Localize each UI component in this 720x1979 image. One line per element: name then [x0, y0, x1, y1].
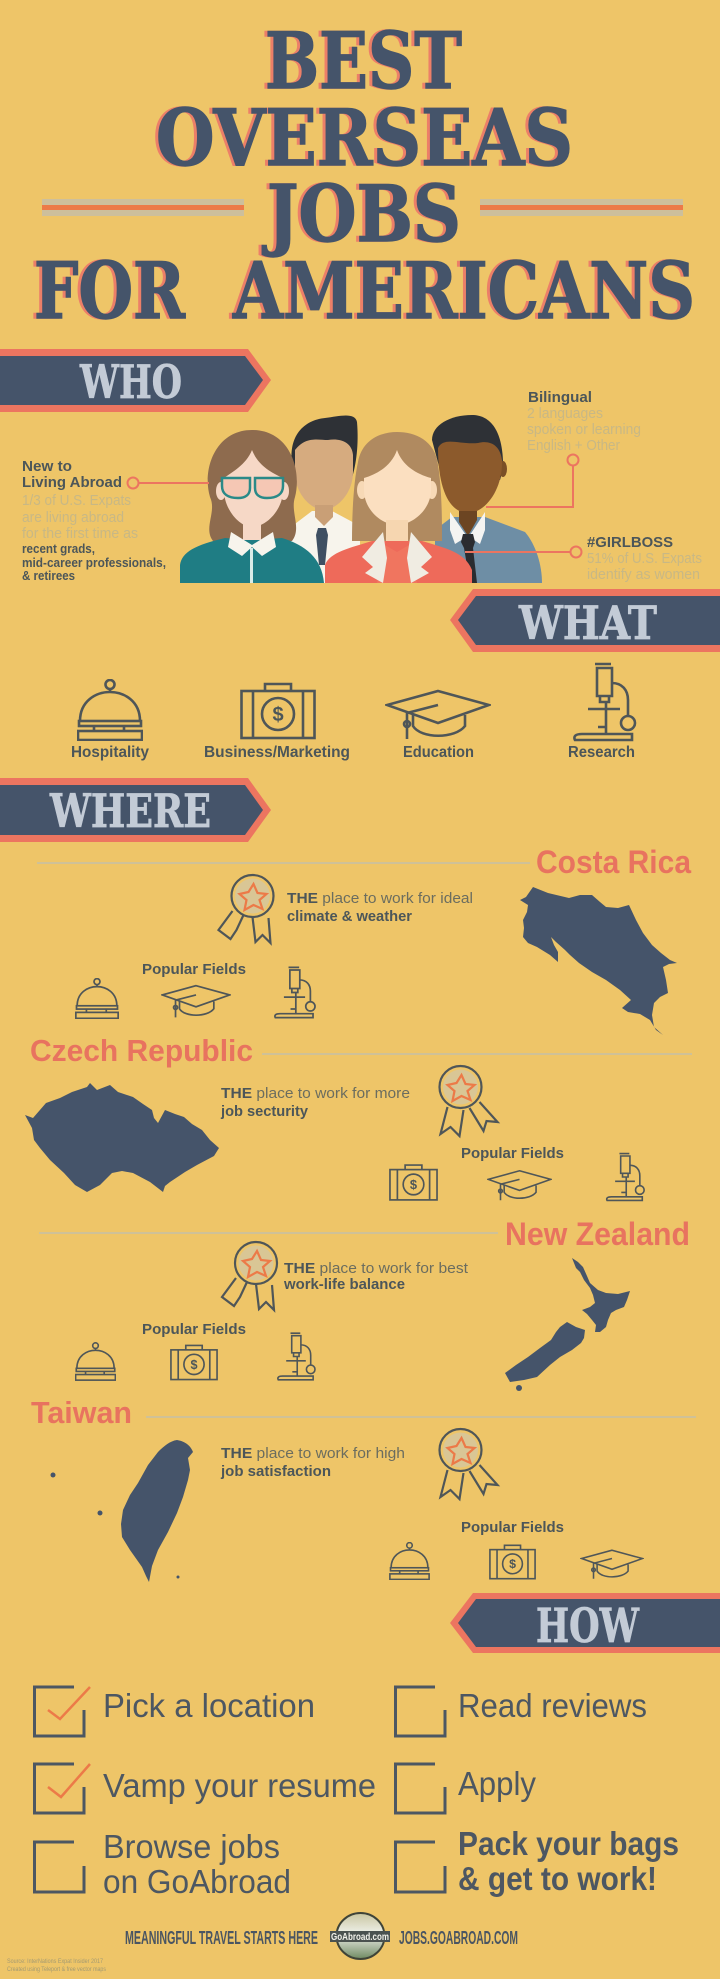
text block: work-life balance	[283, 1276, 405, 1293]
man two	[432, 415, 542, 583]
icon: graduation cap	[387, 691, 489, 739]
connector: new to living abroad	[128, 478, 209, 488]
heading: Taiwan	[31, 1395, 132, 1430]
heading: New Zealand	[505, 1216, 690, 1252]
text block	[287, 890, 473, 925]
title: BEST	[265, 16, 462, 107]
callout: bilingual	[527, 389, 641, 454]
checklist: apply	[396, 1764, 536, 1813]
popular fields	[76, 1321, 315, 1380]
title rule left	[42, 199, 244, 216]
logo: GoAbroad globe: GoAbroad.com	[331, 1932, 389, 1943]
icon: briefcase	[242, 684, 314, 738]
man one	[287, 416, 360, 583]
WHAT banner: WHAT	[518, 596, 657, 650]
source note	[7, 1959, 106, 1973]
heading: Czech Republic	[30, 1033, 253, 1068]
logo: GoAbroad globe	[330, 1913, 390, 1959]
callout: bilingual: Bilingual	[528, 389, 592, 406]
text block: THE place to work for high	[221, 1445, 405, 1462]
WHO banner	[0, 349, 271, 412]
text block: THE place to work for ideal	[287, 890, 473, 907]
text block: THE place to work for best	[284, 1260, 469, 1277]
callout: new to living abroad: recent grads,	[22, 541, 95, 556]
text block	[220, 1445, 405, 1480]
callout: new to living abroad: for the first time as	[22, 525, 138, 542]
checklist: browse jobs	[34, 1828, 291, 1900]
icon: medal	[440, 1066, 498, 1136]
title rule right	[480, 199, 683, 216]
footer tagline: MEANINGFUL TRAVEL STARTS HERE	[125, 1928, 318, 1948]
title	[34, 16, 695, 337]
callout: bilingual: English + Other	[527, 437, 620, 454]
glasses	[222, 478, 283, 498]
map: Taiwan	[50, 1440, 193, 1582]
text block	[283, 1260, 469, 1293]
checklist: vamp your resume	[34, 1764, 376, 1813]
checklist: pack your bags: Pack your bags	[458, 1825, 679, 1862]
what: hospitality: Hospitality	[71, 744, 149, 761]
callout: new to living abroad: 1/3 of U.S. Expats	[22, 492, 131, 509]
checklist: browse jobs: on GoAbroad	[103, 1863, 291, 1900]
callout: new to living abroad: & retirees	[22, 568, 75, 583]
panel: Costa Rica	[37, 844, 691, 1035]
checklist: pack your bags: & get to work!	[458, 1860, 657, 1897]
checklist: apply: Apply	[458, 1765, 536, 1802]
what: business marketing: Business/Marketing	[204, 744, 350, 761]
connector: bilingual	[486, 454, 578, 507]
title: FOR	[34, 246, 186, 337]
popular fields	[76, 961, 315, 1018]
illustration: four professionals	[180, 415, 542, 583]
checklist: pick a location: Pick a location	[103, 1687, 315, 1724]
checklist: read reviews	[396, 1687, 647, 1736]
callout: new to living abroad: Living Abroad	[22, 474, 122, 491]
icon: medal	[440, 1429, 498, 1499]
heading: Costa Rica	[536, 844, 691, 880]
panel: New Zealand	[39, 1216, 690, 1391]
what: education: Education	[403, 744, 474, 761]
callout: girlboss	[587, 534, 702, 583]
map: Czech Republic	[25, 1083, 219, 1192]
checklist: pack your bags	[396, 1825, 679, 1897]
text block: job satisfaction	[220, 1463, 331, 1480]
WHAT banner	[450, 589, 720, 652]
text block: job secturity	[220, 1103, 309, 1120]
popular fields	[390, 1145, 644, 1200]
title: OVERSEAS	[156, 93, 573, 184]
woman two	[325, 432, 472, 583]
checklist: read reviews: Read reviews	[458, 1687, 647, 1724]
what: research	[568, 664, 635, 761]
checklist: vamp your resume: Vamp your resume	[103, 1767, 376, 1804]
popular fields	[390, 1519, 642, 1579]
callout: girlboss: identify as women	[587, 566, 700, 583]
callout: new to living abroad: are living abroad	[22, 509, 124, 526]
popular fields: Popular Fields	[142, 961, 246, 978]
connector: girlboss	[465, 546, 582, 558]
WHERE banner	[0, 778, 271, 842]
text block	[220, 1085, 410, 1120]
panel: Czech Republic	[25, 1033, 692, 1200]
what: education	[387, 691, 489, 761]
popular fields: Popular Fields	[461, 1145, 564, 1162]
title: JOBS	[262, 169, 461, 260]
panel: Taiwan	[31, 1395, 696, 1582]
what: hospitality	[71, 680, 149, 761]
map: New Zealand	[505, 1258, 630, 1391]
HOW banner: HOW	[536, 1599, 640, 1654]
text block: climate & weather	[287, 908, 412, 925]
callout: bilingual: 2 languages	[527, 405, 603, 422]
WHO banner: WHO	[79, 355, 182, 409]
callout: new to living abroad: mid-career professionals,	[22, 555, 166, 570]
map: Costa Rica	[520, 887, 677, 1035]
callout: girlboss: #GIRLBOSS	[587, 534, 673, 551]
source note: Created using Teleport & free vector maps	[7, 1967, 106, 1973]
footer url: JOBS.GOABROAD.COM	[399, 1928, 518, 1948]
source note: Source: InterNations Expat Insider 2017	[7, 1959, 104, 1965]
icon: bell	[78, 680, 142, 740]
HOW banner	[450, 1593, 720, 1654]
checklist: browse jobs: Browse jobs	[103, 1828, 280, 1865]
icon: microscope	[574, 664, 635, 740]
popular fields: Popular Fields	[142, 1321, 246, 1338]
what: business marketing	[204, 684, 350, 761]
checklist: pick a location	[34, 1687, 315, 1736]
WHERE banner: WHERE	[49, 784, 211, 838]
icon: medal	[222, 1242, 277, 1310]
what: research: Research	[568, 744, 635, 761]
woman one	[180, 430, 324, 583]
text block: THE place to work for more	[221, 1085, 410, 1102]
popular fields: Popular Fields	[461, 1519, 564, 1536]
callout: new to living abroad: New to	[22, 458, 72, 475]
callout: girlboss: 51% of U.S. Expats	[587, 550, 702, 567]
callout: bilingual: spoken or learning	[527, 421, 641, 438]
icon: medal	[218, 875, 274, 943]
callout: new to living abroad	[22, 458, 166, 583]
